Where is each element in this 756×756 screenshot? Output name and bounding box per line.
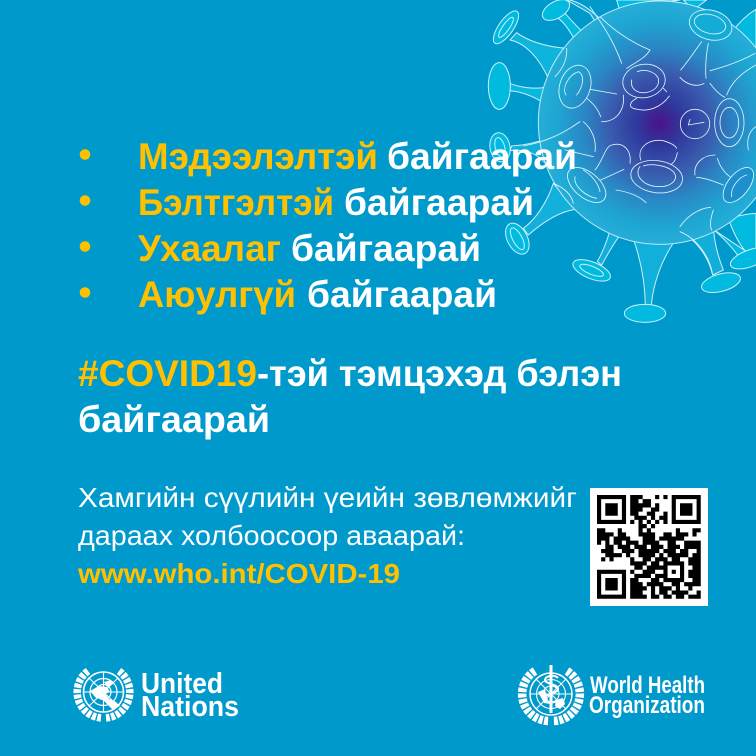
spike: upper left — [492, 10, 564, 76]
WHO wordmark: World Health — [590, 672, 705, 699]
bullet 1: Мэдээлэлтэй — [138, 136, 378, 177]
bullet 4 — [80, 274, 497, 315]
headline: байгаарай — [78, 399, 270, 440]
spike: bottom — [624, 241, 674, 322]
spike: right lower — [715, 212, 756, 270]
spike: bottom left — [572, 233, 619, 282]
UN wordmark — [141, 668, 239, 723]
bullet 1: байгаарай — [387, 136, 577, 177]
spike: left lower mid — [489, 132, 546, 164]
sphere surface details — [523, 5, 756, 275]
advice text: Хамгийн сүүлийн үеийн зөвлөмжийг — [78, 482, 577, 513]
bullet 3 — [80, 228, 481, 269]
United Nations logo — [77, 668, 239, 723]
spike: top right — [736, 8, 756, 47]
spike: left — [488, 63, 545, 109]
headline: #COVID19 — [78, 353, 257, 394]
bullet 2 — [80, 182, 534, 223]
bullet 3: байгаарай — [291, 228, 481, 269]
WHO emblem — [522, 665, 580, 721]
spike: top left — [542, 0, 581, 38]
bullet 2: Бэлтгэлтэй — [138, 182, 334, 223]
advice text: www.who.int/COVID-19 — [77, 558, 400, 589]
WHO wordmark — [589, 672, 705, 719]
bullet 1 — [80, 136, 577, 177]
UN wordmark: Nations — [141, 691, 239, 723]
spikes: top edge — [616, 0, 708, 8]
bullet 3: Ухаалаг — [138, 228, 281, 269]
World Health Organization logo — [522, 665, 705, 721]
spike: lower left — [501, 183, 575, 258]
sphere body — [538, 1, 756, 244]
QR code — [590, 488, 708, 606]
virus illustration — [488, 0, 756, 322]
bullet 2: байгаарай — [344, 182, 534, 223]
spike: top front — [567, 0, 599, 20]
WHO wordmark: Organization — [589, 692, 705, 719]
spike: bottom right — [692, 232, 741, 293]
headline: -тэй тэмцэхэд бэлэн — [257, 353, 622, 394]
advice text — [77, 482, 577, 589]
headline — [78, 353, 622, 440]
UN emblem — [77, 671, 130, 718]
bullet 4: Аюулгүй — [138, 274, 296, 315]
bullet 4: байгаарай — [307, 274, 497, 315]
advice text: дараах холбоосоор аваарай: — [78, 520, 465, 551]
UN wordmark: United — [141, 668, 223, 700]
bullet list — [80, 136, 577, 315]
